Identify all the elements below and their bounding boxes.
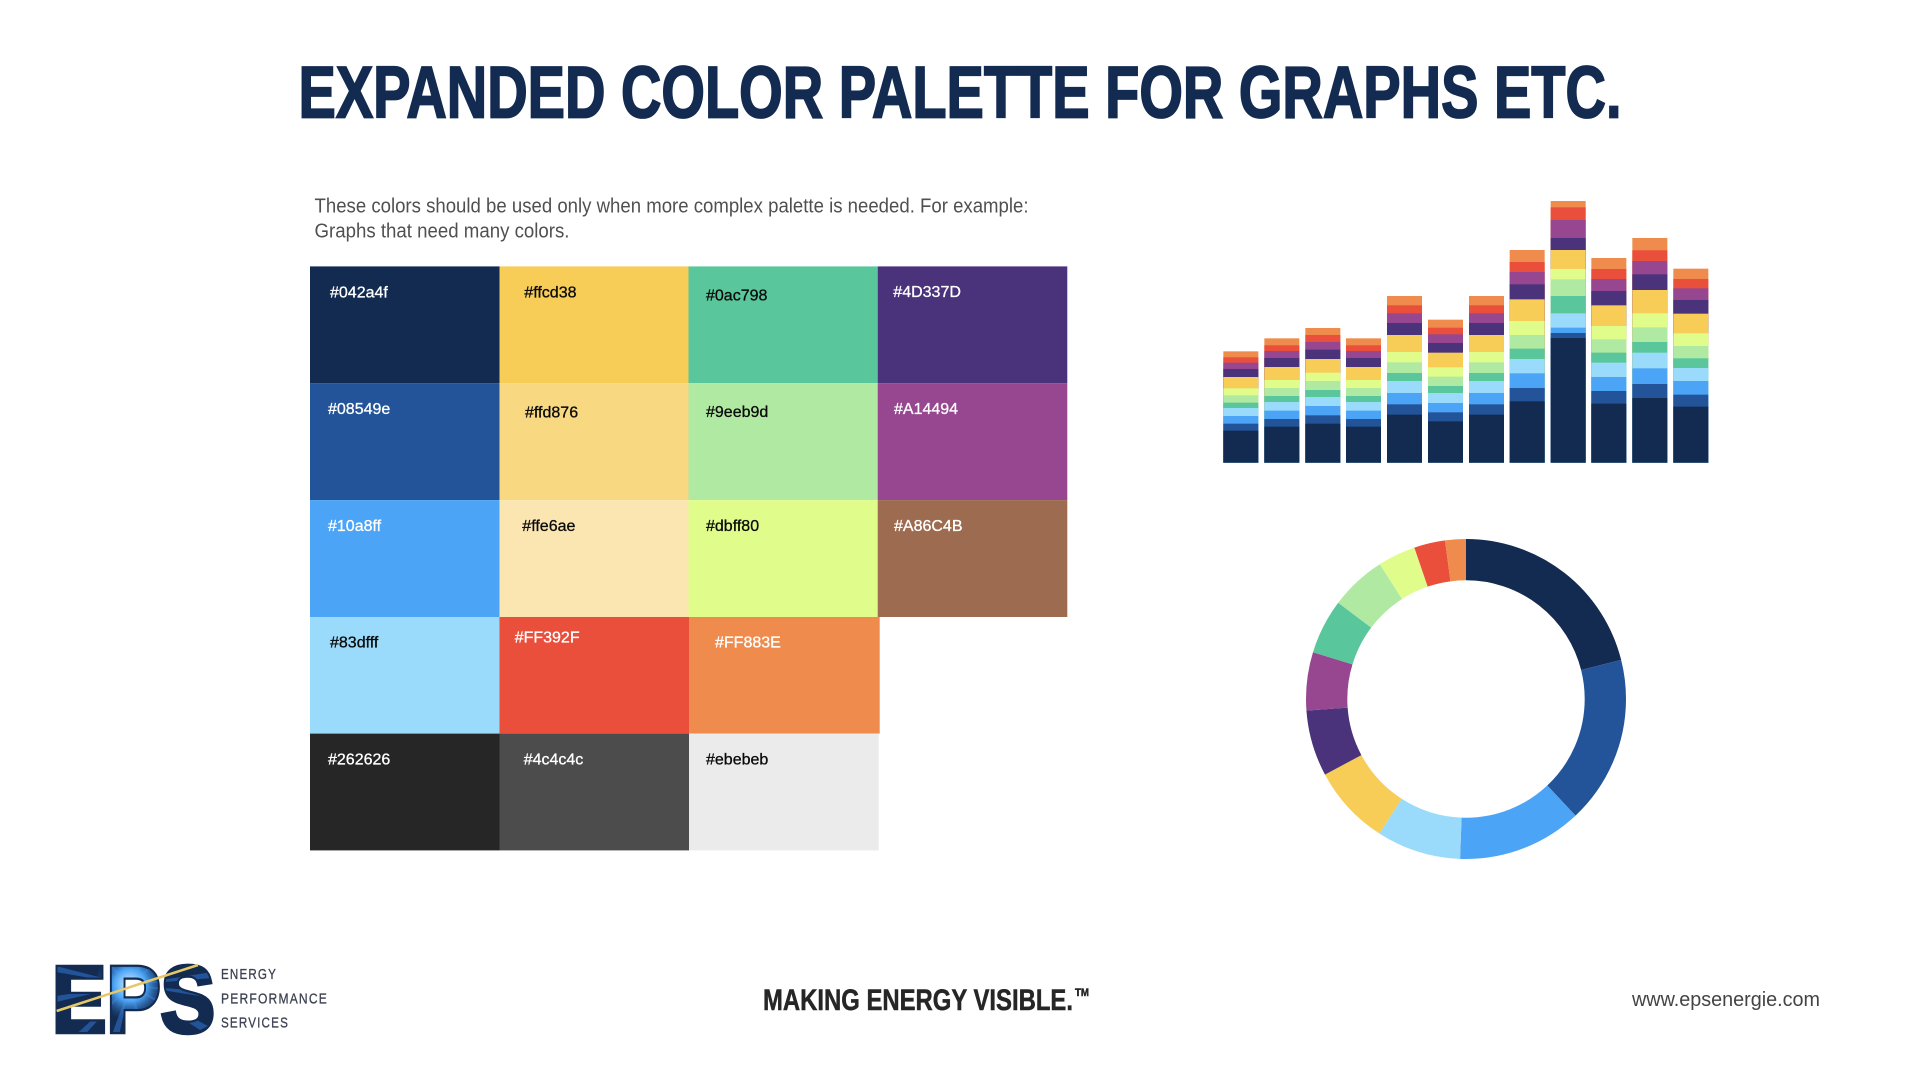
- intro text: [314, 196, 1028, 243]
- swatch: #FF392F: #FF392F: [515, 630, 580, 647]
- swatch: #ebebeb: #ebebeb: [706, 752, 768, 768]
- logo wordmark: EPS: [52, 947, 215, 1053]
- swatch: #4D337D: #4D337D: [893, 284, 961, 301]
- bar 6: [1428, 320, 1463, 463]
- swatch: #08549e: #08549e: [328, 401, 390, 418]
- swatch: #4D337D: [878, 266, 1067, 383]
- swatch: #10a8ff: #10a8ff: [328, 518, 382, 535]
- swatch: #08549e: [310, 383, 500, 500]
- swatch: #ffe6ae: [500, 500, 688, 617]
- swatch: #ebebeb: [689, 734, 879, 850]
- swatch: #A14494: #A14494: [894, 401, 958, 418]
- donut chart: [1327, 560, 1605, 838]
- bar 9: [1551, 201, 1586, 463]
- swatch: #0ac798: #0ac798: [706, 287, 767, 304]
- swatch: #ffd876: #ffd876: [525, 404, 578, 422]
- swatch: #042a4f: #042a4f: [330, 284, 388, 301]
- bar 8: [1510, 250, 1545, 463]
- bar 5: [1387, 296, 1422, 463]
- bar 4: [1346, 338, 1381, 463]
- logo text: SERVICES: [221, 1014, 289, 1032]
- swatch: #4c4c4c: [500, 734, 689, 850]
- tagline: TM: [1075, 987, 1089, 999]
- swatch: #4c4c4c: #4c4c4c: [524, 751, 583, 768]
- swatch: #83dfff: #83dfff: [330, 635, 379, 652]
- swatch: #ffd876: [500, 383, 688, 500]
- swatch: #262626: [310, 734, 500, 850]
- bar 2: [1264, 338, 1299, 463]
- swatch: #FF883E: #FF883E: [715, 634, 781, 652]
- bar 1: [1223, 351, 1258, 463]
- logo text: PERFORMANCE: [221, 990, 328, 1008]
- stacked bar chart: [1223, 201, 1708, 463]
- website: www.epsenergie.com: [1631, 988, 1820, 1011]
- swatch: #A86C4B: #A86C4B: [894, 518, 962, 535]
- intro text: Graphs that need many colors.: [314, 221, 570, 243]
- swatch: #0ac798: [688, 266, 878, 383]
- swatch: #dbff80: [688, 500, 878, 617]
- swatch: #A86C4B: [878, 500, 1067, 617]
- bar 11: [1632, 238, 1667, 463]
- swatch: #A14494: [878, 383, 1067, 500]
- swatch: #dbff80: #dbff80: [706, 518, 759, 535]
- logo starburst: [58, 966, 210, 1032]
- swatch: #ffcd38: [500, 266, 688, 383]
- intro text: These colors should be used only when more complex palette is needed. For example:: [314, 196, 1028, 218]
- logo text: ENERGY: [221, 966, 277, 983]
- swatch: #9eeb9d: [688, 383, 878, 500]
- panel: colour palette swatches: [310, 266, 1067, 850]
- swatch: #ffe6ae: #ffe6ae: [522, 518, 575, 535]
- swatch: #83dfff: [310, 617, 500, 734]
- bar 3: [1305, 328, 1340, 463]
- logo swoosh: [57, 965, 198, 1011]
- swatch: #FF392F: [500, 617, 689, 734]
- swatch: #FF883E: [689, 617, 880, 734]
- logo text: [221, 966, 328, 1032]
- swatch: #9eeb9d: #9eeb9d: [706, 404, 768, 421]
- swatch: #042a4f: [310, 266, 500, 383]
- bar 7: [1469, 296, 1504, 463]
- bar 12: [1673, 269, 1708, 463]
- swatch: #10a8ff: [310, 500, 500, 617]
- bar 10: [1591, 258, 1626, 463]
- swatch: #262626: #262626: [328, 751, 390, 768]
- tagline: MAKING ENERGY VISIBLE.: [763, 984, 1073, 1017]
- swatch: #ffcd38: #ffcd38: [524, 284, 577, 301]
- logo: EPS: [56, 964, 326, 1036]
